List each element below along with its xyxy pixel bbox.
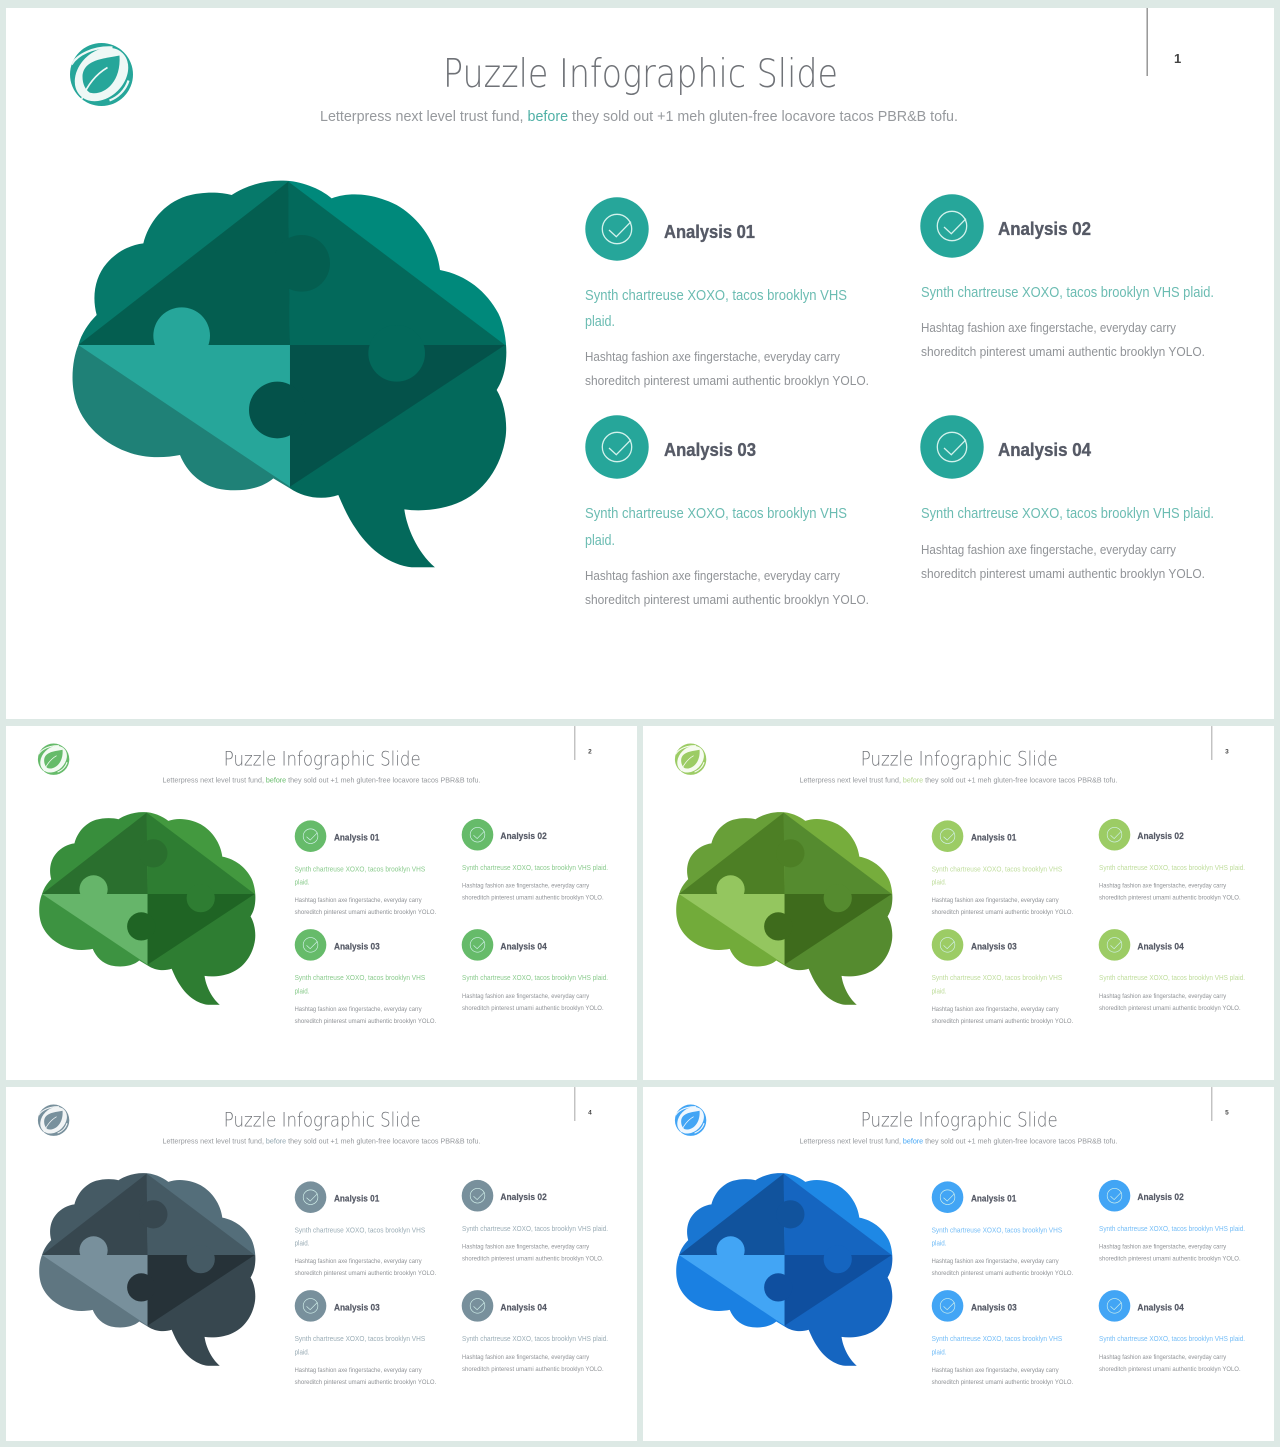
item: Analysis 03: Synth chartreuse XOXO, tacos brooklyn VHS [295,1334,425,1343]
item: Analysis 04 [462,1290,608,1373]
subtitle: Letterpress next level trust fund, before they sold out +1 meh gluten-free locavore tacos PBR&B tofu. [163,1136,480,1145]
page number: 2 [588,748,592,755]
page number: 1 [1174,51,1181,66]
puzzle brain [39,812,256,1005]
item: Analysis 01: shoreditch pinterest umami authentic brooklyn YOLO. [295,909,436,916]
item: Analysis 03: Analysis 03 [334,941,380,951]
item: Analysis 01: plaid. [295,1239,310,1248]
logo [38,1104,70,1136]
item: Analysis 01: Synth chartreuse XOXO, tacos brooklyn VHS [932,865,1062,874]
item: Analysis 04: Analysis 04 [500,941,547,951]
item: Analysis 02: Hashtag fashion axe fingerstache, everyday carry [1099,1244,1227,1251]
item: Analysis 04: Analysis 04 [998,440,1091,460]
item: Analysis 03: Hashtag fashion axe fingerstache, everyday carry [295,1006,422,1013]
item: Analysis 04: Hashtag fashion axe fingerstache, everyday carry [462,993,590,1000]
item: Analysis 01 [932,1181,1073,1277]
item: Analysis 02: Analysis 02 [1137,1192,1184,1202]
item: Analysis 02 [1099,1180,1245,1263]
item: Analysis 01 [585,197,869,388]
item: Analysis 03: Analysis 03 [664,440,756,460]
item: Analysis 01: plaid. [932,1239,947,1248]
item: Analysis 03 [295,929,436,1025]
item: Analysis 04: Synth chartreuse XOXO, tacos brooklyn VHS plaid. [921,505,1214,522]
item: Analysis 01: Analysis 01 [971,1194,1016,1204]
logo [38,744,70,775]
panel: slide 3 lime [643,726,1274,1080]
item: Analysis 01: Hashtag fashion axe fingerstache, everyday carry [932,897,1059,904]
item: Analysis 01: plaid. [932,878,947,887]
page number [574,1087,592,1121]
item: Analysis 03: Analysis 03 [971,941,1017,951]
item: Analysis 03: shoreditch pinterest umami authentic brooklyn YOLO. [295,1018,436,1025]
item: Analysis 03 [932,929,1073,1025]
item: Analysis 04 [920,415,1214,581]
item: Analysis 01: Analysis 01 [664,222,755,242]
puzzle brain [39,1173,256,1366]
item: Analysis 02: shoreditch pinterest umami authentic brooklyn YOLO. [921,344,1205,359]
puzzle brain [72,180,506,568]
item: Analysis 03: plaid. [295,987,310,996]
item: Analysis 03: plaid. [295,1348,310,1357]
item: Analysis 02: Analysis 02 [500,1192,547,1202]
item: Analysis 04: shoreditch pinterest umami authentic brooklyn YOLO. [921,566,1205,581]
title: Puzzle Infographic Slide [224,1108,421,1131]
title: Puzzle Infographic Slide [224,747,421,770]
item: Analysis 04 [1099,929,1245,1012]
item: Analysis 01: plaid. [585,313,615,330]
logo [70,43,133,106]
item: Analysis 02: Hashtag fashion axe fingerstache, everyday carry [462,1244,590,1251]
item: Analysis 02: Synth chartreuse XOXO, tacos brooklyn VHS plaid. [921,284,1214,301]
item: Analysis 01: Synth chartreuse XOXO, tacos brooklyn VHS [295,865,425,874]
item: Analysis 03: plaid. [932,1348,947,1357]
item: Analysis 03: Analysis 03 [971,1302,1017,1312]
item: Analysis 03: Hashtag fashion axe fingerstache, everyday carry [932,1367,1059,1374]
page number: 5 [1225,1109,1229,1116]
item: Analysis 01: Hashtag fashion axe fingerstache, everyday carry [932,1258,1059,1265]
item: Analysis 01: Synth chartreuse XOXO, tacos brooklyn VHS [295,1226,425,1235]
logo [674,744,706,775]
item: Analysis 03: shoreditch pinterest umami authentic brooklyn YOLO. [932,1018,1073,1025]
item: Analysis 01 [932,820,1073,916]
item: Analysis 01 [295,1181,436,1277]
item: Analysis 01: Synth chartreuse XOXO, tacos brooklyn VHS [932,1226,1062,1235]
item: Analysis 04: Hashtag fashion axe fingerstache, everyday carry [1099,1354,1227,1361]
subtitle: Letterpress next level trust fund, before they sold out +1 meh gluten-free locavore tacos PBR&B tofu. [800,775,1117,784]
item: Analysis 03: plaid. [585,532,615,549]
item: Analysis 03 [932,1290,1073,1386]
subtitle: Letterpress next level trust fund, before they sold out +1 meh gluten-free locavore tacos PBR&B tofu. [800,1136,1117,1145]
page number: 4 [588,1109,592,1116]
page number: 3 [1225,748,1229,755]
item: Analysis 02 [920,194,1214,359]
puzzle brain [676,812,892,1005]
item: Analysis 03: shoreditch pinterest umami authentic brooklyn YOLO. [295,1379,436,1386]
item: Analysis 03 [295,1290,436,1386]
subtitle: Letterpress next level trust fund, before they sold out +1 meh gluten-free locavore tacos PBR&B tofu. [163,775,480,784]
item: Analysis 01: Analysis 01 [334,833,379,843]
item: Analysis 04: Hashtag fashion axe fingerstache, everyday carry [921,542,1176,557]
item: Analysis 02 [462,1180,608,1263]
item: Analysis 03: Synth chartreuse XOXO, tacos brooklyn VHS [932,973,1062,982]
item: Analysis 01: Analysis 01 [971,833,1016,843]
item: Analysis 01: shoreditch pinterest umami authentic brooklyn YOLO. [295,1270,436,1277]
item: Analysis 03: Synth chartreuse XOXO, tacos brooklyn VHS [932,1334,1062,1343]
page number [1146,8,1181,76]
item: Analysis 01: shoreditch pinterest umami authentic brooklyn YOLO. [585,373,869,388]
item: Analysis 01 [295,820,436,916]
item: Analysis 03: Hashtag fashion axe fingerstache, everyday carry [295,1367,422,1374]
item: Analysis 03: shoreditch pinterest umami authentic brooklyn YOLO. [585,592,869,607]
item: Analysis 02: Hashtag fashion axe fingerstache, everyday carry [462,883,590,890]
item: Analysis 01: shoreditch pinterest umami authentic brooklyn YOLO. [932,909,1073,916]
item: Analysis 04 [1099,1290,1245,1373]
item: Analysis 03: Synth chartreuse XOXO, tacos brooklyn VHS [585,505,847,522]
title: Puzzle Infographic Slide [861,1108,1058,1131]
title: Puzzle Infographic Slide [861,747,1058,770]
subtitle: Letterpress next level trust fund, before they sold out +1 meh gluten-free locavore tacos PBR&B tofu. [320,108,958,125]
item: Analysis 02: Analysis 02 [1137,831,1184,841]
item: Analysis 02: Analysis 02 [500,831,547,841]
item: Analysis 04 [462,929,608,1012]
item: Analysis 01: plaid. [295,878,310,887]
item: Analysis 03: shoreditch pinterest umami authentic brooklyn YOLO. [932,1379,1073,1386]
item: Analysis 03: Analysis 03 [334,1302,380,1312]
panel: slide 5 blue [643,1087,1274,1441]
page number [1211,1087,1229,1121]
puzzle brain [676,1173,892,1366]
page number [574,726,592,760]
item: Analysis 01: Synth chartreuse XOXO, tacos brooklyn VHS [585,287,847,304]
item: Analysis 01: shoreditch pinterest umami authentic brooklyn YOLO. [932,1270,1073,1277]
panel: slide 4 slate [6,1087,637,1441]
item: Analysis 03: plaid. [932,987,947,996]
item: Analysis 01: Hashtag fashion axe fingerstache, everyday carry [585,349,840,364]
item: Analysis 01: Hashtag fashion axe fingerstache, everyday carry [295,1258,422,1265]
item: Analysis 01: Analysis 01 [334,1194,379,1204]
item: Analysis 02: Hashtag fashion axe fingerstache, everyday carry [921,320,1176,335]
title: Puzzle Infographic Slide [443,52,838,97]
logo [674,1104,706,1136]
panel: slide 2 green [6,726,637,1080]
item: Analysis 04: Analysis 04 [1137,1302,1184,1312]
item: Analysis 02 [1099,819,1245,902]
item: Analysis 02 [462,819,608,902]
item: Analysis 03: Synth chartreuse XOXO, tacos brooklyn VHS [295,973,425,982]
item: Analysis 01: Hashtag fashion axe fingerstache, everyday carry [295,897,422,904]
page number [1211,726,1229,760]
item: Analysis 03: Hashtag fashion axe fingerstache, everyday carry [932,1006,1059,1013]
item: Analysis 04: Hashtag fashion axe fingerstache, everyday carry [462,1354,590,1361]
panel: slide 1 teal [6,8,1274,719]
item: Analysis 03 [585,415,869,607]
item: Analysis 02: Analysis 02 [998,219,1091,239]
item: Analysis 03: Hashtag fashion axe fingerstache, everyday carry [585,568,840,583]
item: Analysis 04: Hashtag fashion axe fingerstache, everyday carry [1099,993,1227,1000]
item: Analysis 02: Hashtag fashion axe fingerstache, everyday carry [1099,883,1227,890]
item: Analysis 04: Analysis 04 [1137,941,1184,951]
item: Analysis 04: Analysis 04 [500,1302,547,1312]
